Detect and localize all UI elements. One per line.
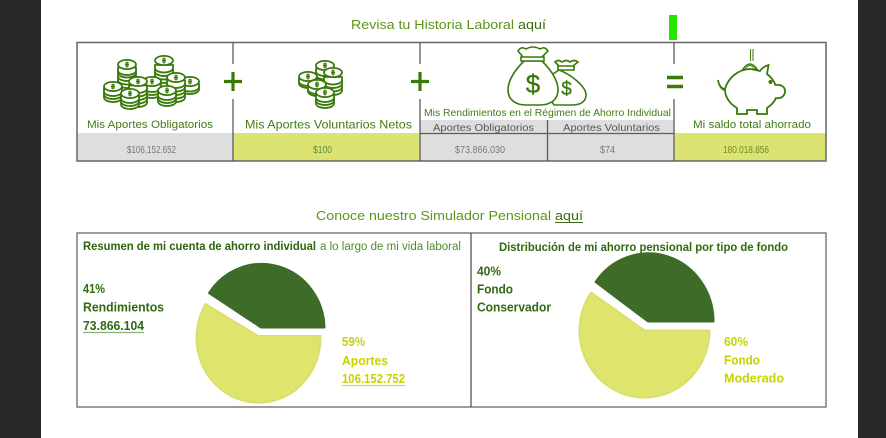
- value: obligatorios: $106.152.652: [127, 145, 176, 156]
- heading: Simulador Pensional: Conoce nuestro Simulador Pensional: [316, 208, 551, 223]
- icon: money bags: $: [526, 69, 541, 99]
- pie chart: rendimientos vs aportes: [197, 264, 324, 403]
- panel title: [83, 241, 461, 253]
- legend: aportes: 106.152.752: [342, 372, 405, 386]
- label: rendimientos: Mis Rendimientos en el Régimen de Ahorro Individual: [424, 107, 671, 119]
- green marker: [669, 15, 677, 40]
- panel title: Distribución de mi ahorro pensional por tipo de fondo: [499, 242, 788, 254]
- panel title: Resumen de mi cuenta de ahorro individual: [83, 241, 316, 253]
- value: voluntarios: $100: [313, 145, 332, 156]
- table frame: [77, 42, 826, 161]
- legend: fondo moderado: [724, 335, 784, 386]
- legend: aportes: [342, 335, 405, 386]
- legend: rendimientos: [83, 282, 164, 333]
- icon: money bags: $: [561, 79, 572, 100]
- legend: aportes: 59%: [342, 335, 365, 349]
- icon: money bags: [508, 47, 586, 105]
- legend: fondo conservador: [477, 264, 551, 314]
- yellow cell: voluntarios: [233, 133, 420, 161]
- legend: aportes: Aportes: [342, 354, 388, 368]
- icon: coin stacks large: [104, 56, 199, 109]
- panel: resumen frame: [77, 233, 826, 407]
- panel: distribucion por fondo: [477, 242, 788, 398]
- pie slice: fondo conservador 40%: [596, 253, 714, 322]
- value: total: 180.018.856: [723, 145, 769, 156]
- icon: coin stacks small: [299, 61, 342, 108]
- panel divider: [470, 233, 472, 407]
- heading: Simulador Pensional: aquí: [555, 208, 583, 223]
- legend: fondo moderado: 60%: [724, 335, 748, 349]
- legend: fondo conservador: 40%: [477, 264, 501, 278]
- value: rendimientos obligatorios: $73.866.030: [455, 145, 505, 156]
- legend: fondo conservador: Fondo: [477, 282, 513, 296]
- operator: equals: [667, 78, 683, 86]
- legend: fondo moderado: Moderado: [724, 372, 784, 386]
- grey cells: rendimientos: [420, 120, 674, 161]
- panel: resumen cuenta: [83, 241, 461, 403]
- legend: rendimientos: 73.866.104: [83, 319, 144, 333]
- pie slice: aportes 59%: [197, 304, 321, 403]
- panel: saldo equation table: [77, 42, 826, 161]
- label: sub aportes obligatorios: Aportes Obligatorios: [433, 122, 534, 134]
- pie slice: fondo moderado 60%: [580, 292, 710, 398]
- pie chart: fondos: [580, 253, 714, 398]
- legend: rendimientos: Rendimientos: [83, 300, 164, 314]
- table dividers: [233, 42, 674, 161]
- value: rendimientos voluntarios: $74: [600, 145, 615, 156]
- label: saldo total: Mi saldo total ahorrado: [693, 119, 811, 131]
- heading: Historia Laboral: aquí: [518, 17, 546, 32]
- legend: rendimientos: 41%: [83, 282, 105, 296]
- label: aportes voluntarios: Mis Aportes Voluntarios Netos: [245, 118, 412, 132]
- icon: piggy bank: [718, 49, 785, 114]
- panel title: a lo largo de mi vida laboral: [320, 241, 461, 253]
- operator: plus 2: [411, 72, 429, 91]
- pie slice: rendimientos 41%: [209, 264, 324, 328]
- operator: plus 1: [224, 72, 242, 91]
- grey cell: obligatorios: [77, 133, 233, 161]
- legend: fondo conservador: Conservador: [477, 300, 551, 314]
- heading: Historia Laboral: Revisa tu Historia Laboral: [351, 17, 514, 32]
- legend: fondo moderado: Fondo: [724, 354, 760, 368]
- label: aportes obligatorios: Mis Aportes Obligatorios: [87, 119, 214, 131]
- yellow cell: total: [674, 133, 826, 161]
- label: sub aportes voluntarios: Aportes Voluntarios: [563, 122, 660, 134]
